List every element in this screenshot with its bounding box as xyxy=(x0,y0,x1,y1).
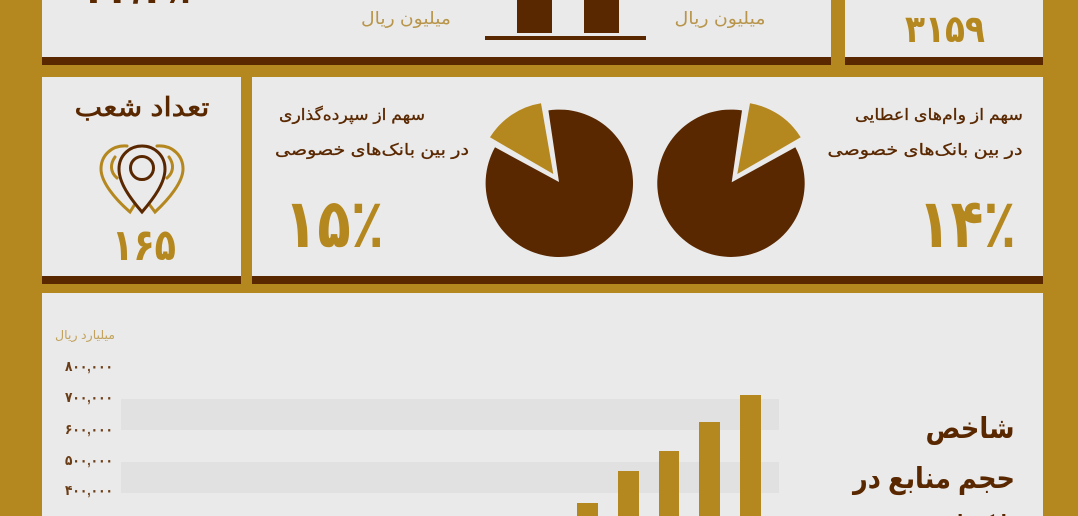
figure 15 percent: ۱۵٪ xyxy=(284,186,384,262)
pie chart: deposits xyxy=(486,103,633,257)
panel: market shares xyxy=(252,77,1043,284)
chart title: شاخص xyxy=(926,413,1014,445)
y axis labels: ۵۰۰,۰۰۰ xyxy=(65,452,113,468)
y axis labels: ۷۰۰,۰۰۰ xyxy=(65,389,113,405)
y axis labels: ۶۰۰,۰۰۰ xyxy=(65,421,113,437)
unit label right: میلیون ریال xyxy=(674,9,766,28)
figure 14 percent: ۱۴٪ xyxy=(918,186,1016,262)
y axis labels xyxy=(65,358,113,498)
text: deposits share xyxy=(275,105,469,160)
panel: resources chart xyxy=(42,293,1043,516)
bar chart xyxy=(577,395,761,516)
text: loans share xyxy=(828,107,1023,160)
mini bar chart xyxy=(485,0,646,40)
panel: top summary xyxy=(42,0,831,65)
y axis labels: ۸۰۰,۰۰۰ xyxy=(65,358,113,374)
panel: top right figure xyxy=(845,0,1043,65)
chart title: حجم منابع در xyxy=(851,463,1015,495)
panel: branch count xyxy=(42,77,241,284)
icon: location pin xyxy=(101,146,183,212)
unit label left: میلیون ریال xyxy=(361,9,451,28)
heading: branches: تعداد شعب xyxy=(74,92,210,122)
text: loans share: سهم از وام‌های اعطایی xyxy=(855,107,1023,125)
y axis labels: ۴۰۰,۰۰۰ xyxy=(65,482,113,498)
figure 165: ۱۶۵ xyxy=(112,221,176,270)
chart title xyxy=(851,413,1015,516)
text: loans share: در بین بانک‌های خصوصی xyxy=(828,142,1022,160)
text: deposits share: سهم از سپرده‌گذاری xyxy=(279,105,425,125)
chart bands xyxy=(121,399,779,493)
pie chart: loans xyxy=(657,103,805,257)
text: deposits share: در بین بانک‌های خصوصی xyxy=(275,142,469,160)
figure 3159: ۳۱۵۹ xyxy=(905,9,985,51)
unit label: میلیارد ریال xyxy=(55,328,115,343)
